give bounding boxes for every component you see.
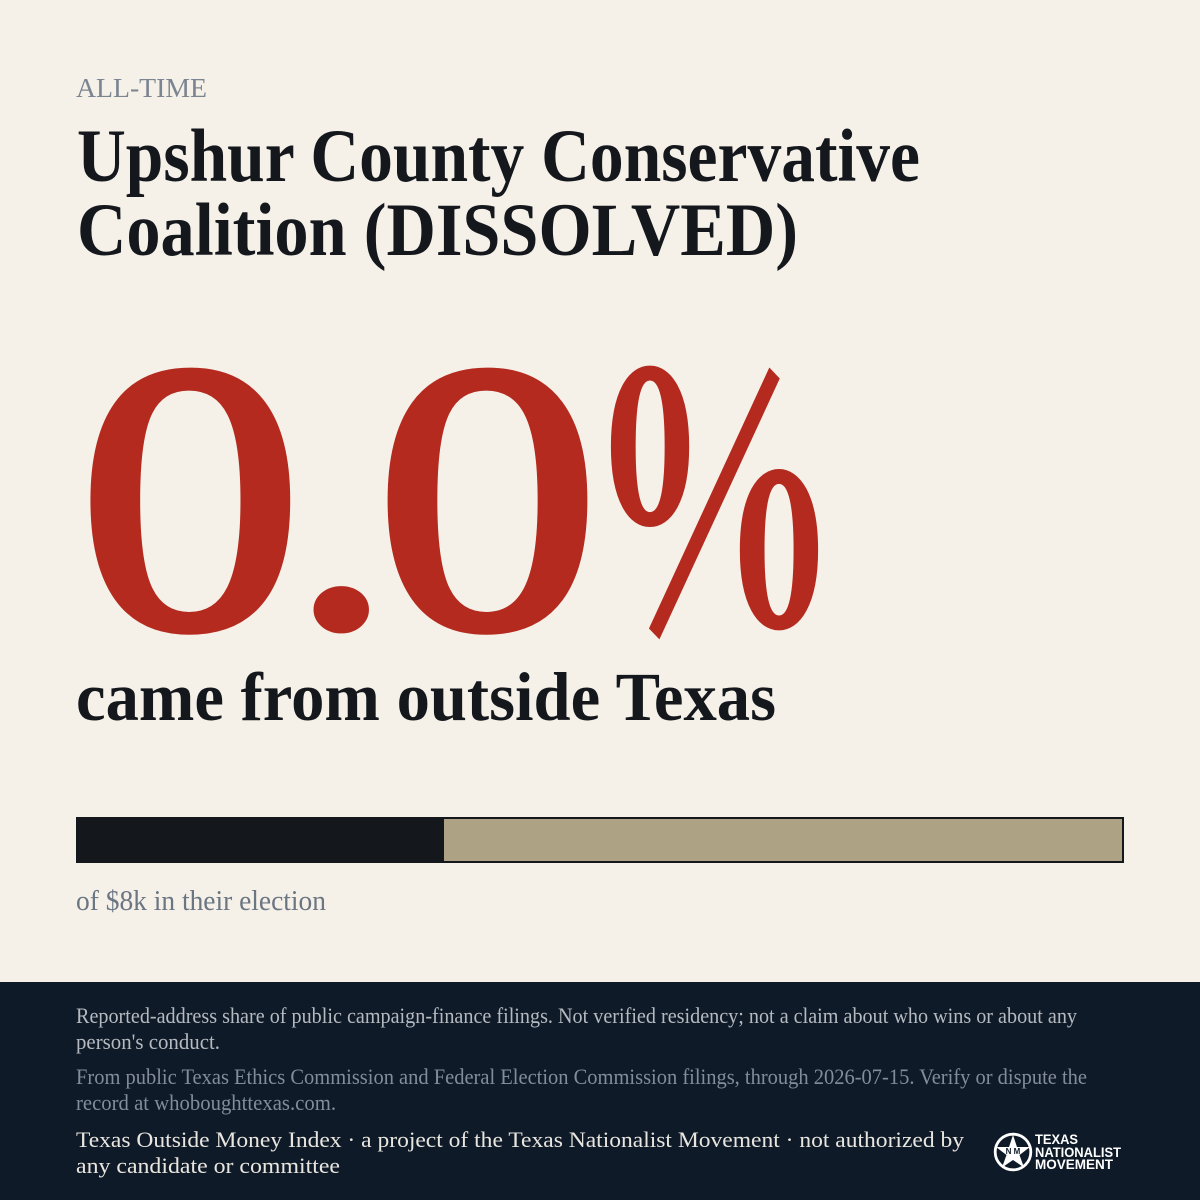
bar caption: of $8k in their election xyxy=(76,885,326,917)
logo wordmark: MOVEMENT xyxy=(1035,1156,1113,1172)
disclaimer text xyxy=(76,1003,1077,1054)
eyebrow: ALL-TIME: ALL-TIME xyxy=(76,73,207,103)
progress bar xyxy=(76,817,1123,863)
source text: From public Texas Ethics Commission and Federal Election Commission filings, through 2026-07-15. Verify or dispute the xyxy=(76,1064,1087,1089)
disclaimer text: Reported-address share of public campaign-finance filings. Not verified residency; not a claim about who wins or about any xyxy=(76,1003,1077,1028)
big percentage: 0.0%: 0.0 xyxy=(78,286,600,711)
title xyxy=(77,115,920,272)
icon: star in circle: N M xyxy=(1006,1147,1021,1156)
title: Coalition (DISSOLVED) xyxy=(77,189,798,272)
attribution text: any candidate or committee xyxy=(76,1153,340,1178)
title: Upshur County Conservative xyxy=(77,115,920,198)
attribution text: Texas Outside Money Index · a project of the Texas Nationalist Movement · not authorized by xyxy=(76,1127,964,1152)
source text: record at whoboughttexas.com. xyxy=(76,1090,336,1115)
attribution text xyxy=(76,1127,964,1178)
subheading: came from outside Texas xyxy=(76,659,776,735)
big percentage: 0.0% xyxy=(78,234,826,722)
logo wordmark: NATIONALIST xyxy=(1035,1144,1121,1160)
logo: Texas Nationalist Movement xyxy=(995,1131,1121,1172)
footer panel xyxy=(0,982,1200,1200)
source text xyxy=(76,1064,1087,1115)
disclaimer text: person's conduct. xyxy=(76,1029,220,1054)
big percentage: 0.0%: % xyxy=(604,234,826,722)
logo wordmark: TEXAS xyxy=(1035,1131,1078,1147)
logo wordmark xyxy=(1035,1131,1121,1172)
